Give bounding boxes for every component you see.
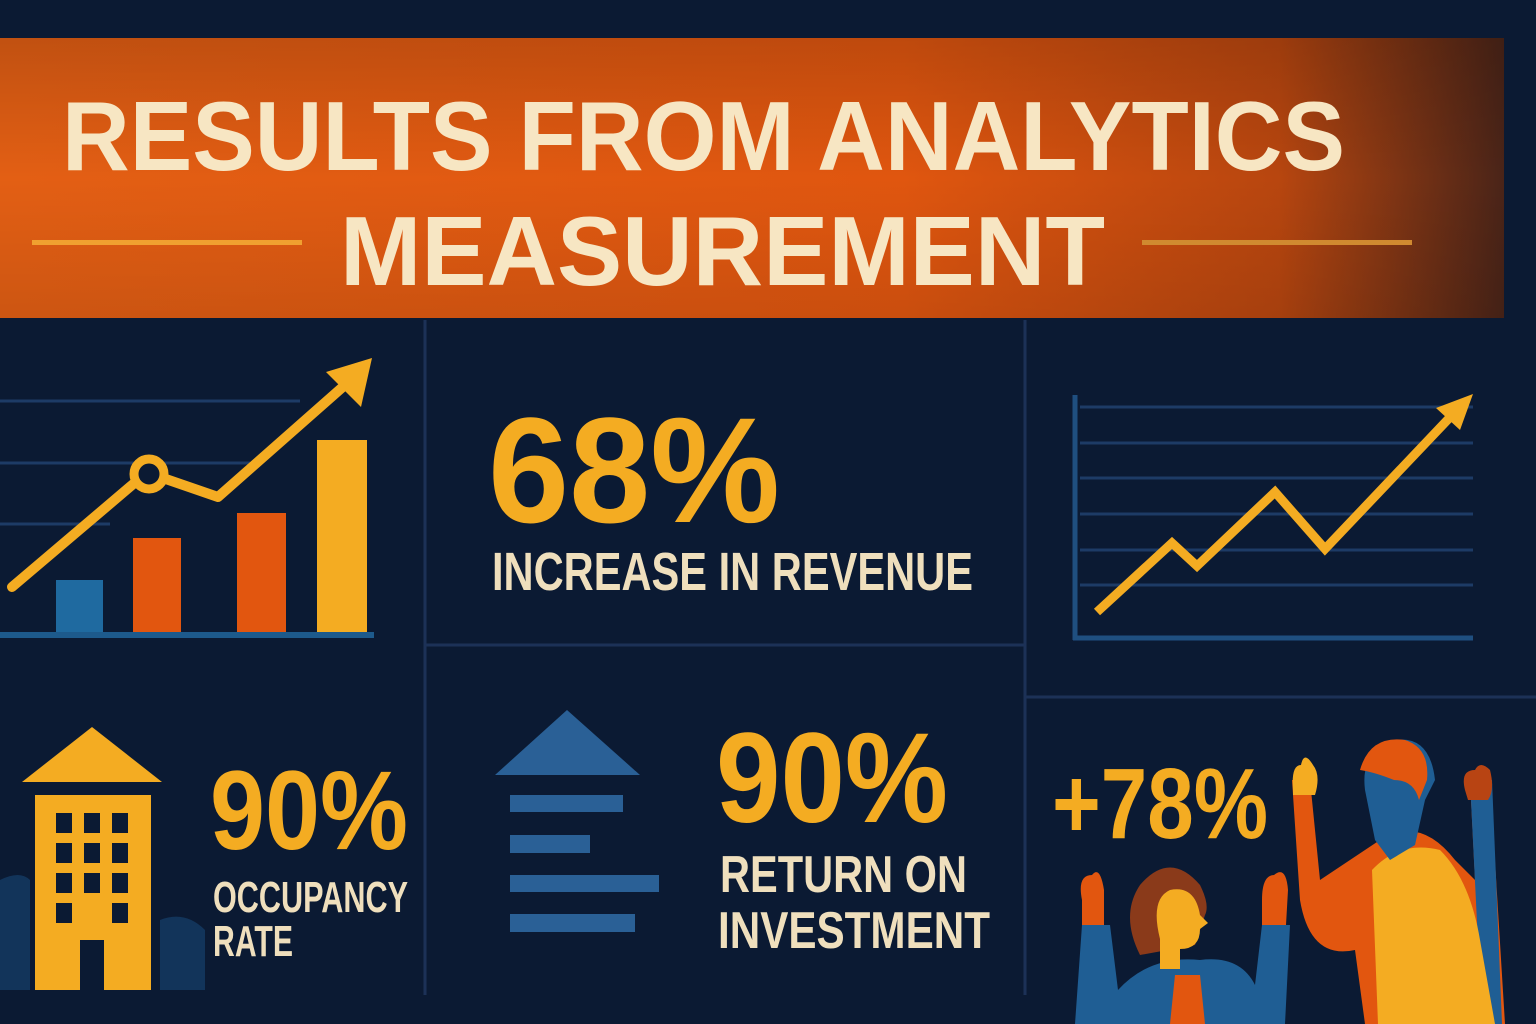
- stat: 90% occupancy rate: [210, 748, 408, 966]
- icon: building: [0, 727, 205, 990]
- stat: 90% return on investment: 90%: [716, 707, 948, 850]
- stat: 90% occupancy rate: RATE: [213, 917, 293, 966]
- illustration: people celebrating: [1075, 739, 1505, 1024]
- stat: +78%: +78%: [1052, 748, 1268, 860]
- stat: 68% increase in revenue: [488, 386, 973, 602]
- stat: 90% return on investment: [716, 707, 990, 960]
- bar chart with rising trend arrow: [0, 358, 374, 638]
- stat: 90% return on investment: INVESTMENT: [718, 902, 990, 960]
- stat: 90% return on investment: RETURN ON: [720, 846, 967, 904]
- title: MEASUREMENT: [340, 196, 1105, 306]
- stat: 90% occupancy rate: 90%: [210, 748, 408, 873]
- title: RESULTS FROM ANALYTICS: [62, 81, 1345, 191]
- icon: up arrow with bars: [495, 710, 659, 932]
- line chart right: [1073, 394, 1473, 640]
- man: [1292, 780, 1505, 1024]
- stat: 68% increase in revenue: INCREASE IN REVENUE: [492, 542, 973, 602]
- grid lines: [425, 320, 1536, 995]
- stat: 68% increase in revenue: 68%: [488, 386, 780, 554]
- woman: [1075, 925, 1290, 1024]
- stat: 90% occupancy rate: OCCUPANCY: [213, 873, 408, 922]
- title: [62, 81, 1345, 306]
- header banner: [0, 38, 1504, 318]
